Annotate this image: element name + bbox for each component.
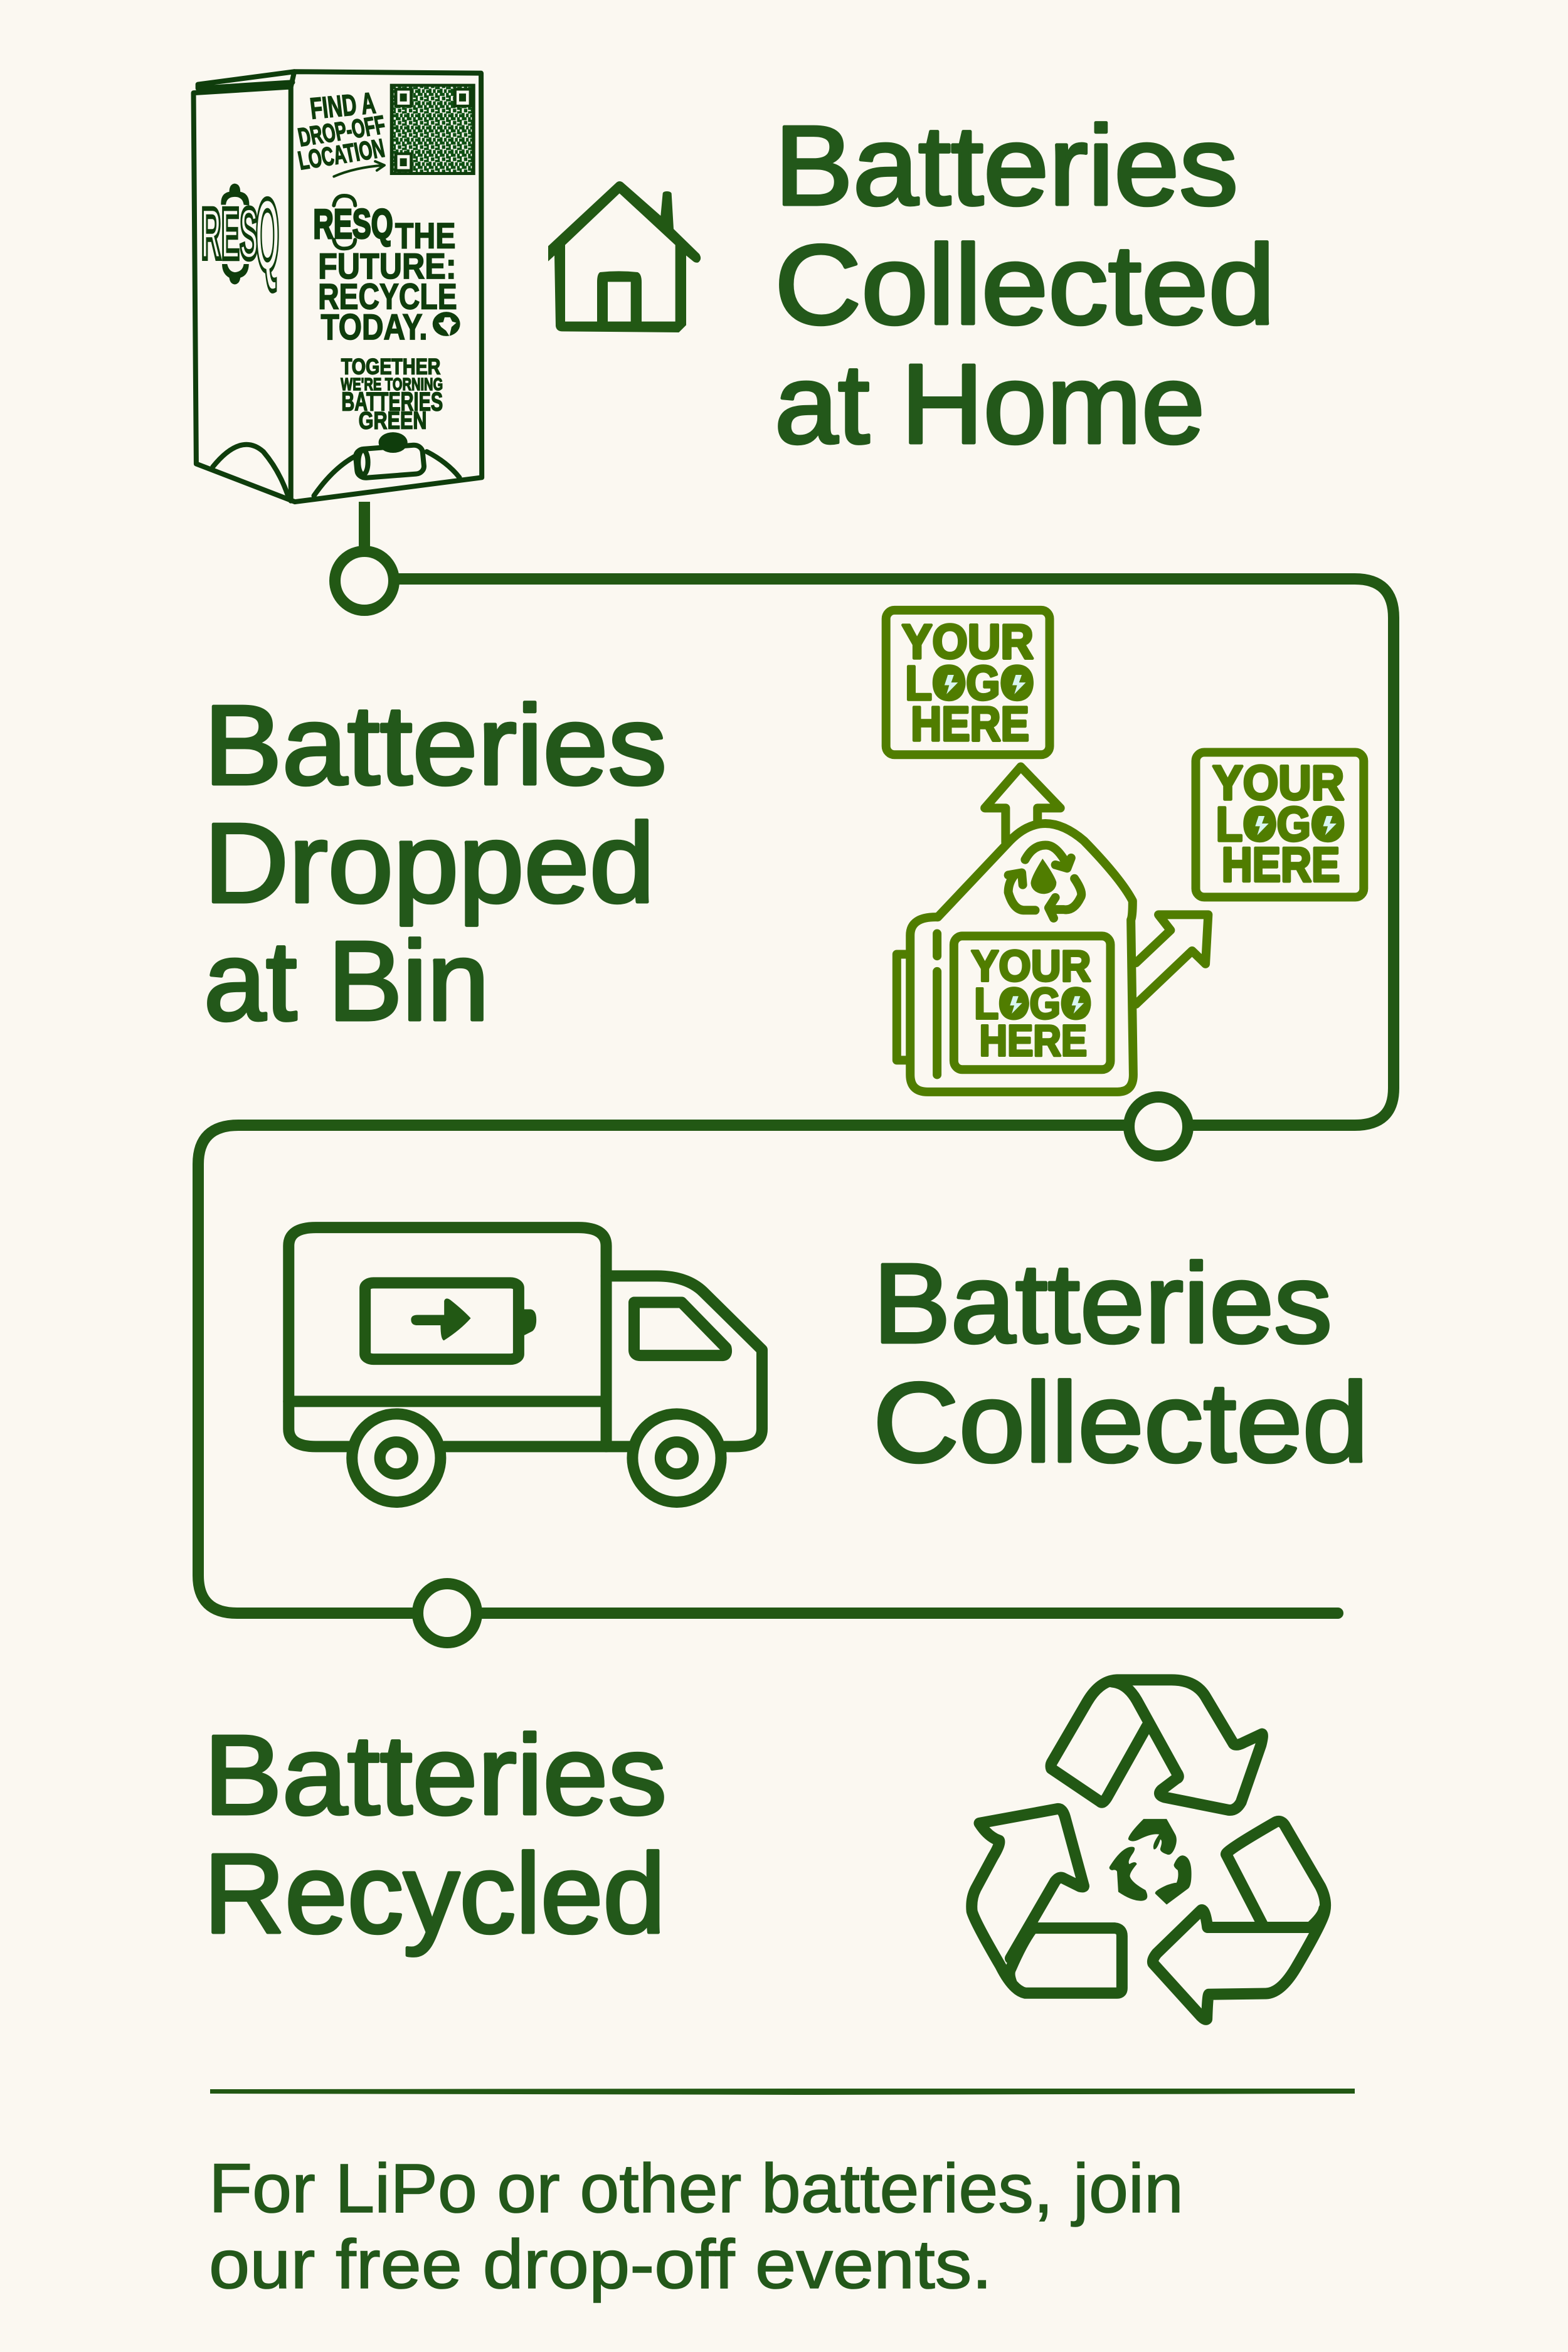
icon group: drop-off bin with logos <box>886 610 1364 1092</box>
heading: batteries dropped at bin: Batteries <box>204 682 667 808</box>
step node: bin to truck <box>1129 1097 1188 1156</box>
poster slogan: RESQ the future: RESQ <box>313 201 393 246</box>
heading: batteries collected: Batteries <box>873 1241 1332 1367</box>
recycling arrows on bin <box>1025 845 1071 868</box>
poster slogan: RESQ the future <box>313 196 460 347</box>
logo box: on bin: LOGO <box>974 978 1091 1028</box>
poster slogan: RESQ the future: THE <box>395 216 455 256</box>
central small recycling mark <box>1110 1819 1192 1905</box>
logo box: on bin: HERE <box>979 1015 1087 1065</box>
logo box: top: LOGO <box>905 657 1034 711</box>
poster tagline: together we're torning batteries green: BATTERIES <box>341 388 443 416</box>
poster headline: find a drop-off location: DROP-OFF <box>295 110 388 152</box>
battery on truck <box>365 1283 536 1359</box>
connector path between steps <box>198 502 1394 1613</box>
logo box: top: YOUR <box>902 615 1034 669</box>
poster tagline: together we're torning batteries green <box>341 354 443 434</box>
logo box: on bin <box>954 936 1110 1069</box>
poster headline: find a drop-off location: FIND A <box>309 86 378 125</box>
logo box: right: LOGO <box>1216 798 1345 852</box>
logo box: top <box>886 610 1050 755</box>
poster headline: find a drop-off location <box>295 86 388 176</box>
battery cap <box>379 432 408 453</box>
poster slogan: RESQ the future: RECYCLE <box>318 277 457 316</box>
icon: collection bin with poster: Q <box>255 178 280 293</box>
icon: delivery truck with battery <box>289 1227 762 1502</box>
logo box: right: YOUR <box>1212 756 1344 810</box>
heading: batteries recycled: Recycled <box>204 1831 665 1957</box>
poster tagline: together we're torning batteries green: WE'RE TORNING <box>341 375 443 395</box>
logo box: on bin: YOUR <box>971 941 1091 990</box>
heading: batteries dropped at bin: Dropped <box>204 800 655 926</box>
poster headline: find a drop-off location: LOCATION <box>295 134 387 176</box>
footer divider <box>210 2089 1355 2095</box>
drop-off bin outline <box>897 767 1208 1092</box>
heading: batteries dropped at bin <box>204 682 667 1044</box>
poster slogan: RESQ the future: TODAY. <box>320 307 428 347</box>
icon: collection bin with poster <box>194 72 482 502</box>
heading: batteries recycled <box>204 1712 667 1957</box>
poster slogan: RESQ the future: FUTURE: <box>318 246 457 286</box>
logo box: top: HERE <box>911 697 1029 751</box>
heading: batteries collected at home: at Home <box>775 341 1205 467</box>
poster tagline: together we're torning batteries green: GREEN <box>359 407 426 434</box>
heading: batteries dropped at bin: at Bin <box>204 918 489 1044</box>
logo box: right: HERE <box>1222 838 1340 892</box>
heading: batteries collected at home <box>775 103 1275 467</box>
footer note: our free drop-off events. <box>209 2226 992 2303</box>
footer note: For LiPo or other batteries, join <box>209 2150 1184 2227</box>
footer note <box>209 2150 1184 2303</box>
step node: truck to recycling <box>418 1584 477 1643</box>
QR code <box>391 85 474 174</box>
heading: batteries collected at home: Collected <box>775 222 1275 348</box>
heading: batteries collected: Collected <box>873 1360 1369 1486</box>
poster tagline: together we're torning batteries green: TOGETHER <box>341 354 440 379</box>
icon: recycling symbol <box>972 1680 1325 2020</box>
side panel RESQ logo <box>201 178 280 293</box>
icon: collection bin with poster: RES <box>201 193 258 275</box>
logo box: right <box>1196 752 1364 897</box>
icon: house <box>548 181 701 332</box>
heading: batteries collected at home: Batteries <box>775 103 1238 229</box>
heading: batteries recycled: Batteries <box>204 1712 667 1838</box>
step node: bin to home <box>335 551 394 610</box>
recycling symbol with drop <box>1009 859 1081 918</box>
heading: batteries collected <box>873 1241 1369 1486</box>
